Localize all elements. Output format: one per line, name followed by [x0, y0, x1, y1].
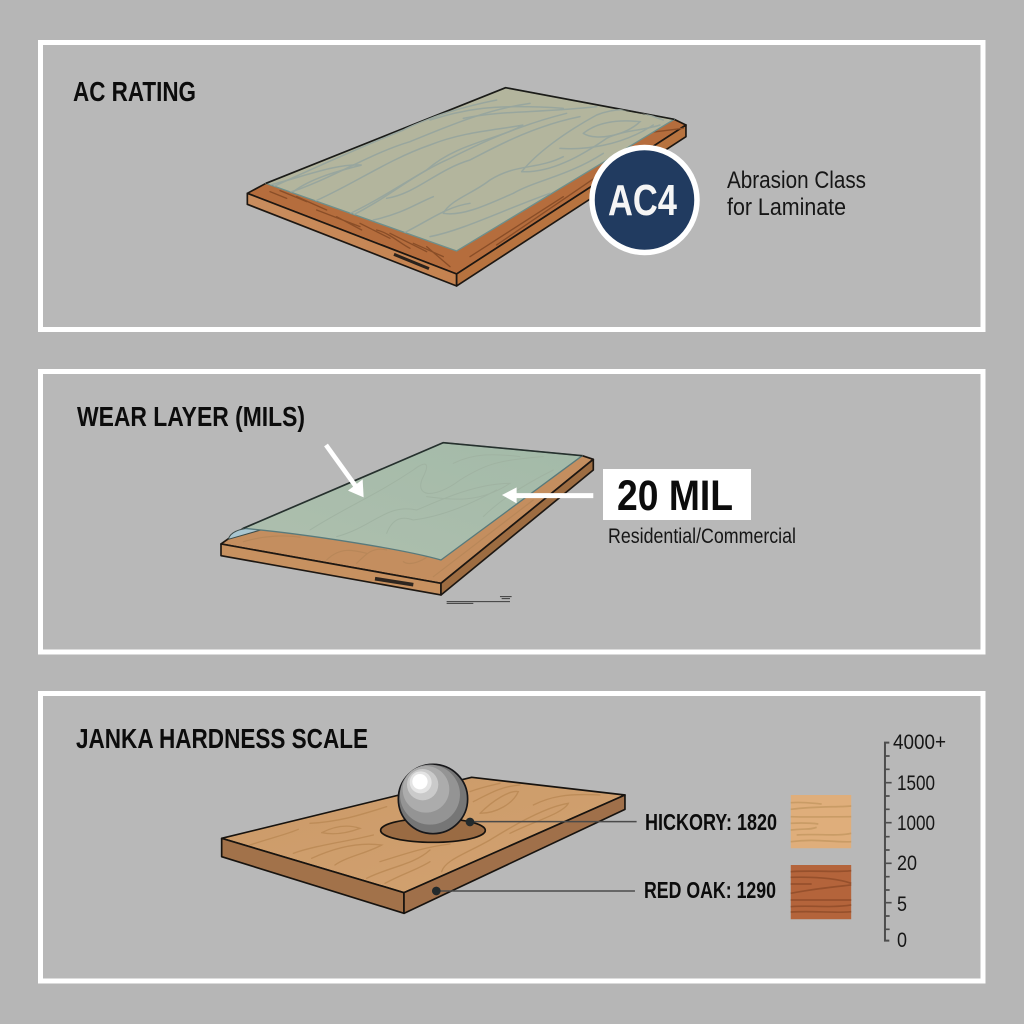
- scale labels: 1500: [897, 772, 935, 795]
- scale labels: 1000: [897, 812, 935, 835]
- label: hickory: HICKORY: 1820: [645, 809, 777, 835]
- wear sheet: [243, 443, 582, 560]
- scale labels: [893, 731, 946, 952]
- heading: Janka hardness scale: JANKA HARDNESS SCALE: [76, 723, 368, 754]
- swatch: hickory: [791, 795, 851, 848]
- text: residential/commercial: Residential/Commercial: [608, 525, 796, 548]
- heading: wear layer: WEAR LAYER (MILS): [77, 401, 305, 432]
- panel: wear layer: [40, 372, 983, 652]
- dent: [381, 818, 485, 842]
- label: red oak: RED OAK: 1290: [644, 877, 776, 903]
- illustration: laminate plank with wear sheet: [247, 88, 686, 286]
- text: abrasion class description: Abrasion Class: [727, 167, 866, 194]
- heading: AC rating: AC RATING: [73, 76, 196, 107]
- swatches: [791, 795, 851, 919]
- curled film edge: [228, 501, 310, 539]
- panel: AC rating: [40, 42, 983, 330]
- arrow: pointing at wear surface: [326, 445, 364, 497]
- callout: 20 mil: 20 MIL: [617, 472, 733, 520]
- leader: hickory: [466, 818, 637, 826]
- panel: Janka hardness scale: [40, 694, 983, 981]
- steel ball: [398, 764, 468, 834]
- leader: red oak: [432, 887, 635, 895]
- text: abrasion class description: for Laminate: [727, 194, 846, 221]
- arrow: pointing from 20 mil label: [502, 487, 593, 503]
- text: abrasion class description: [727, 167, 866, 221]
- badge: AC4: AC4: [608, 176, 677, 225]
- scale labels: 0: [897, 929, 907, 952]
- slot mark: [394, 254, 429, 269]
- badge: AC4: [592, 148, 697, 252]
- scale axis: [885, 743, 892, 941]
- scale labels: 5: [897, 893, 907, 916]
- scale labels: 20: [897, 852, 917, 875]
- small scale mark: [447, 597, 512, 603]
- illustration: plank with clear wear layer: [221, 443, 593, 603]
- scale labels: 4000+: [893, 731, 946, 754]
- swatch: red oak: [791, 865, 851, 919]
- slot mark: [375, 579, 413, 585]
- illustration: wood plank with steel ball: [222, 764, 637, 913]
- wear sheet: [266, 88, 674, 251]
